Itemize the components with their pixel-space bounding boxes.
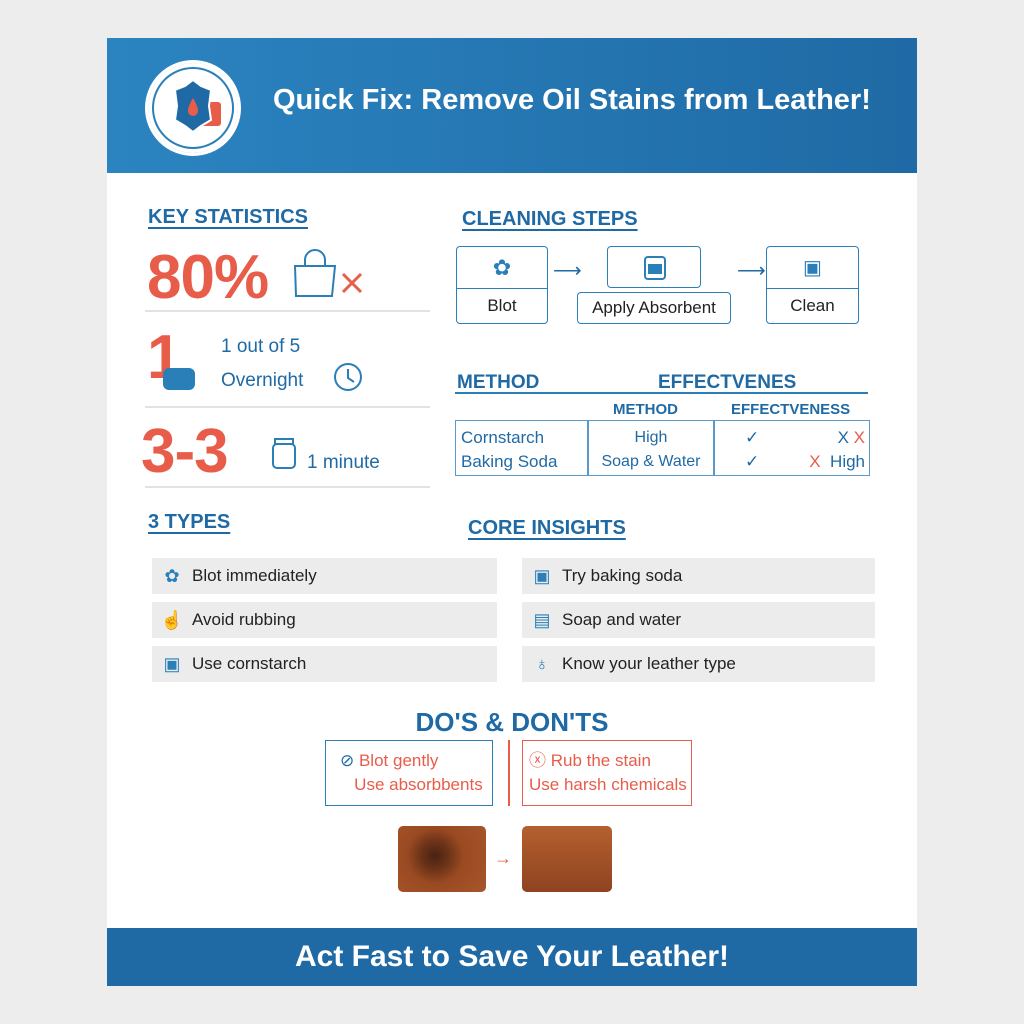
stat 3-3 xyxy=(141,417,380,486)
method table: EFFECTVENESS xyxy=(731,401,850,418)
method table xyxy=(455,372,870,476)
stat 3-3: 1 minute xyxy=(307,452,380,473)
list left: ✿ xyxy=(164,566,180,586)
step: clean xyxy=(766,246,859,324)
method table: X X xyxy=(838,428,865,447)
method table: EFFECTVENES xyxy=(658,372,796,393)
step: blot xyxy=(456,246,548,324)
section: key statistics xyxy=(141,206,430,488)
method table: Soap & Water xyxy=(601,453,700,470)
step: clean: Clean xyxy=(790,296,835,315)
wallets before/after xyxy=(398,826,612,892)
method table: Cornstarch xyxy=(461,428,544,447)
method table: X High xyxy=(809,452,865,471)
list right: ▤ xyxy=(533,610,550,630)
method table: METHOD xyxy=(457,372,539,393)
list left: Use cornstarch xyxy=(192,654,306,673)
method table: Baking Soda xyxy=(461,452,557,471)
heading: KEY STATISTICS xyxy=(148,206,308,228)
list left: ▣ xyxy=(163,654,180,674)
card xyxy=(107,38,917,986)
footer banner xyxy=(107,928,917,986)
list right: Soap and water xyxy=(562,610,681,629)
header banner xyxy=(107,38,917,173)
do box: Use absorbbents xyxy=(354,775,483,794)
list left: ☝ xyxy=(161,610,183,630)
stat 1: Overnight xyxy=(221,370,303,391)
step: apply absorbent: Apply Absorbent xyxy=(592,298,716,317)
heading: do's & don'ts: DO'S & DON'TS xyxy=(416,707,608,737)
list left: Blot immediately xyxy=(192,566,317,585)
section: cleaning steps xyxy=(456,208,859,324)
step: apply absorbent xyxy=(577,246,731,324)
heading: core insights: CORE INSIGHTS xyxy=(468,517,626,539)
stat 1 xyxy=(147,323,362,392)
footer banner: Act Fast to Save Your Leather! xyxy=(295,940,729,973)
step: clean: ▣ xyxy=(803,257,822,279)
wallets before/after: → xyxy=(494,848,512,868)
do box xyxy=(325,740,493,806)
method table: High xyxy=(635,429,667,446)
arrow: ⟶ xyxy=(553,260,582,282)
don't box: ⓧ Rub the stain xyxy=(529,751,651,770)
method table: METHOD xyxy=(613,401,678,418)
step: blot: Blot xyxy=(487,296,517,315)
method table: ✓ xyxy=(745,452,759,471)
title: Quick Fix: Remove Oil Stains from Leather! xyxy=(273,84,871,116)
don't box: Use harsh chemicals xyxy=(529,775,687,794)
list left xyxy=(152,558,497,682)
heading: 3 types: 3 TYPES xyxy=(148,511,230,533)
don't box xyxy=(522,740,692,806)
stat 80%: 80% xyxy=(147,243,268,312)
do box: ⊘ Blot gently xyxy=(340,751,438,770)
stat 80% xyxy=(147,243,362,312)
icon: leather logo xyxy=(145,60,241,156)
list right: Know your leather type xyxy=(562,654,736,673)
list right: Try baking soda xyxy=(562,566,682,585)
method table: ✓ xyxy=(745,428,759,447)
list right xyxy=(522,558,875,682)
step: blot: ✿ xyxy=(493,255,511,280)
list right: ▣ xyxy=(533,566,550,586)
stat 3-3: 3-3 xyxy=(141,417,228,486)
list left: Avoid rubbing xyxy=(192,610,296,629)
heading: CLEANING STEPS xyxy=(462,208,638,230)
list right: ♁ xyxy=(535,654,549,674)
arrow: ⟶ xyxy=(737,260,766,282)
stat 1: 1 out of 5 xyxy=(221,336,300,357)
stat 1: 1 xyxy=(147,323,180,392)
